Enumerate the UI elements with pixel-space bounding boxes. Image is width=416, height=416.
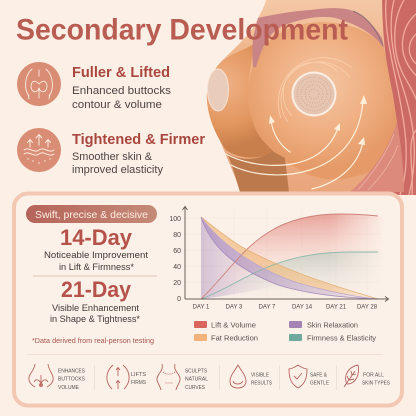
benefit: for all skin types: FOR ALL: [363, 372, 384, 378]
x axis labels: DAY 3: [226, 304, 243, 310]
pill: swift precise decisive: [26, 205, 157, 223]
y axis labels: 80: [173, 232, 181, 239]
icon: hips: [29, 364, 53, 387]
line chart: [169, 206, 388, 310]
footnote: *Data derived from real-person testing: [32, 338, 154, 345]
benefit: lifts firms: FIRMS: [131, 380, 147, 386]
description: improved elasticity: [72, 164, 163, 176]
x axis labels: DAY 14: [292, 304, 313, 310]
benefit: safe and gentle: SAFE &: [310, 372, 328, 378]
benefit: for all skin types: [344, 365, 391, 387]
side shade: [350, 122, 404, 192]
description: [72, 151, 163, 176]
panel: results: [14, 194, 402, 406]
benefit: enhances buttocks volume: BUTTOCKS: [58, 376, 86, 382]
left cheek: [207, 44, 274, 158]
body silhouette: [207, 0, 403, 192]
icon: up arrows: [107, 365, 129, 389]
description: contour & volume: [72, 99, 162, 111]
concentric rings: [278, 58, 352, 122]
waves backdrop: [378, 0, 416, 195]
heading: Fuller & Lifted: [72, 64, 170, 81]
benefit: sculpts natural curves: CURVES: [185, 385, 206, 391]
benefit: sculpts natural curves: [157, 364, 208, 391]
right cheek: [248, 22, 401, 179]
photo: body with patches: [207, 0, 404, 192]
legend: [194, 320, 376, 342]
x axis labels: DAY 28: [357, 304, 378, 310]
icon: buttocks badge: [17, 62, 61, 106]
legend: Skin Relaxation: [307, 320, 358, 330]
y axis labels: 40: [173, 264, 181, 271]
icon: shield: [289, 365, 307, 388]
icon: waist: [157, 364, 180, 390]
benefit: for all skin types: SKIN TYPES: [362, 380, 391, 386]
stat: 14-day: [44, 225, 148, 273]
benefit: enhances buttocks volume: VOLUME: [58, 385, 80, 391]
x axis labels: [193, 304, 378, 310]
stat: 21-day: in Shape & Tightness*: [50, 314, 140, 325]
title: Secondary Development: [16, 14, 348, 46]
benefit: sculpts natural curves: NATURAL: [185, 376, 208, 382]
description: Enhanced buttocks: [72, 85, 172, 97]
legend: Firmness & Elasticity: [307, 334, 376, 342]
benefit: lifts firms: LIFTS: [131, 372, 147, 378]
stat: 21-day: 21-Day: [61, 277, 132, 302]
feature: tightened and firmer: [17, 128, 205, 176]
benefit: safe and gentle: GENTLE: [310, 380, 330, 386]
stat: 21-day: [50, 277, 140, 325]
shadow below cheeks: [227, 151, 289, 192]
y axis labels: 20: [173, 280, 181, 287]
axes: [182, 206, 388, 302]
description: Smoother skin &: [72, 151, 153, 163]
legend: Lift & Volume: [211, 320, 256, 330]
feature: fuller and lifted: [17, 62, 172, 111]
stat: 14-day: 14-Day: [60, 225, 133, 250]
thong: [252, 8, 384, 67]
icon: drop: [230, 365, 246, 388]
stat: 21-day: Visible Enhancement: [52, 303, 139, 314]
description: [72, 85, 172, 111]
legend: Fat Reduction: [211, 334, 258, 342]
main patch: [292, 72, 336, 116]
benefit: visible results: [230, 365, 273, 388]
icon: tightening badge: [17, 128, 61, 172]
benefit: safe and gentle: [289, 365, 330, 388]
y axis labels: 0: [177, 296, 181, 303]
benefit: sculpts natural curves: SCULPTS: [185, 368, 208, 374]
y axis labels: 60: [173, 248, 181, 255]
stat: 14-day: Noticeable Improvement: [44, 250, 148, 261]
benefit: lifts firms: [107, 365, 147, 389]
heading: Tightened & Firmer: [72, 131, 205, 148]
pill: swift precise decisive: Swift, precise & decisive: [35, 209, 148, 221]
benefit: enhances buttocks volume: [29, 364, 86, 391]
lift arrows: [226, 100, 363, 189]
y axis labels: [169, 216, 181, 303]
x axis labels: DAY 7: [259, 304, 276, 310]
y axis labels: 100: [169, 216, 181, 223]
x axis labels: DAY 21: [326, 304, 347, 310]
icon: leaf: [344, 365, 359, 387]
benefit: visible results: RESULTS: [251, 380, 273, 386]
x axis labels: DAY 1: [193, 304, 210, 310]
benefit: enhances buttocks volume: ENHANCES: [58, 368, 86, 374]
benefit: visible results: VISIBLE: [251, 372, 270, 378]
stat: 14-day: in Lift & Firmness*: [59, 262, 134, 273]
left patch: [208, 69, 228, 111]
